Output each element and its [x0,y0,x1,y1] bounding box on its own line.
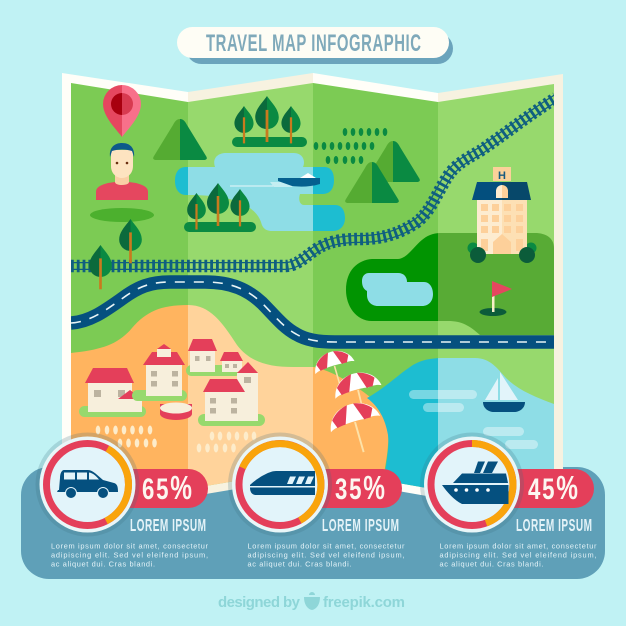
umbrella 3 [325,397,389,459]
field dots [96,426,256,452]
description: ship [440,542,597,568]
forest: lower tree group [184,183,256,232]
icon: freepik logo [304,592,320,610]
crop dots [314,128,387,164]
title banner: TRAVEL MAP INFOGRAPHIC [206,31,421,57]
traveller avatar [90,143,154,222]
umbrella 1 [311,346,359,389]
trees beside railway [89,219,142,289]
description: ship: ac aliquet dui. Cras blandi. [440,560,544,568]
stat block: car 65% [36,432,209,568]
pond on golf course [362,273,433,306]
map land and terrain [71,70,554,500]
stat block: train 35% [228,432,405,568]
label: car: LOREM IPSUM [130,516,206,536]
percent pill 45% [506,469,594,508]
umbrella 2 [331,368,385,409]
footer credit [218,592,405,611]
village houses [79,339,265,426]
description: car: Lorem ipsum dolor sit amet, consectetur [51,542,209,550]
icon: ship [442,462,508,504]
map paper border [62,73,563,498]
folded map [62,70,563,500]
location pin [103,85,141,137]
icon: train [250,471,315,495]
donut gauge 45% [420,432,524,536]
house C and D [186,339,243,376]
golf flag [480,281,512,316]
donut gauge 35% [228,432,332,536]
percent pill 35% [314,469,402,508]
description: ship: Lorem ipsum dolor sit amet, consectetur [440,542,597,550]
hotel: H [498,170,506,182]
forest: upper tree group [232,96,307,147]
description: car: ac aliquet dui. Cras blandi. [51,560,155,568]
percent pill 65%: 65% [142,471,192,507]
icon: car [57,470,118,498]
beach umbrellas [311,346,389,459]
motor boat on lake [230,173,320,187]
railway [71,98,556,266]
village fountain disc [160,402,192,420]
title banner [177,27,453,64]
water ripples [409,390,538,449]
mountain left [153,119,207,160]
description: car: adipiscing elit. Sed vel eleifend ipsum, [51,550,208,560]
house E [198,362,265,426]
description: train [248,542,405,568]
label: train: LOREM IPSUM [322,516,399,536]
house A [79,368,146,417]
house B [132,344,187,401]
label: ship: LOREM IPSUM [516,516,592,536]
description: train: ac aliquet dui. Cras blandi. [248,560,352,568]
footer credit: freepik.com [323,594,405,611]
percent pill 35%: 35% [335,471,385,507]
percent pill 45%: 45% [528,471,578,507]
percent pill 65% [120,469,208,508]
footer credit: designed by [218,594,301,611]
description: car [51,542,209,568]
description: train: adipiscing elit. Sed vel eleifend ipsum, [248,550,404,560]
stat block: ship 45% [420,432,597,568]
bottom info panel background [21,467,605,579]
sailboat [483,372,525,412]
description: ship: adipiscing elit. Sed vel eleifend ipsum, [440,550,596,560]
hotel [468,167,536,263]
mountains right [345,141,420,203]
description: train: Lorem ipsum dolor sit amet, consectetur [248,542,405,550]
road [71,282,556,342]
donut gauge 65% [36,432,140,536]
